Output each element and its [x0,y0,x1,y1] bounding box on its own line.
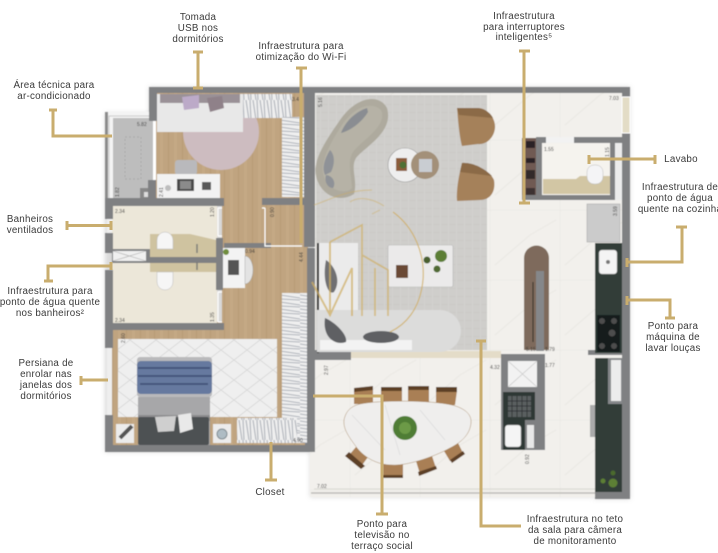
icon: wine rack [522,138,536,200]
icon: L-shaped sofa [317,243,461,353]
dimension labels: 3.59 [613,206,619,216]
callout: USB socket: Tomada [180,12,216,23]
callout: dishwasher: Ponto para [648,321,699,332]
callout: roller blinds: Persiana de [18,358,74,369]
dimension labels: 0.90 [270,207,276,217]
callout: roller blinds: janelas dos [19,380,72,391]
icon: curved sofa [315,99,388,198]
room: bedroom and hall floor [155,92,307,206]
callout: Wi-Fi: otimização do Wi-Fi [256,52,346,63]
dimension labels: 1.82 [115,187,121,197]
callout: ventilated bathrooms: Banheiros [7,214,53,225]
dimension labels: 5.15 [526,347,536,353]
dining chairs [345,386,465,478]
callout: roller blinds: dormitórios [20,391,72,402]
icon: armchairs [457,108,495,201]
callout: dishwasher: lavar louças [645,343,701,354]
callout: TV on terrace: terraço social [351,541,413,552]
callout: Wi-Fi [256,41,346,243]
callout: camera [476,340,624,547]
icon: coffee table [388,245,453,287]
dimension labels: 4.44 [299,252,305,262]
callout: kitchen hot water: Infraestrutura de [642,182,718,193]
callout: technical area: Área técnica para [13,80,95,91]
callout: technical area [13,80,112,136]
callout: dishwasher [627,296,701,354]
callout: technical area: ar-condicionado [17,91,91,102]
callout: Wi-Fi: Infraestrutura para [258,41,344,52]
walls [105,87,630,499]
callout: USB socket: dormitórios [172,34,224,45]
dimension labels: 4.90 [293,438,303,444]
room: living and kitchen floor [314,92,624,354]
dimension labels: 1.35 [210,312,216,322]
callout: smart switches: Infraestrutura [493,11,555,22]
callout: camera: de monitoramento [534,536,617,547]
dimension labels: 3.4 [292,97,299,103]
callout: hot water bathrooms: Infraestrutura para [7,286,93,297]
callout: lavatory: Lavabo [664,154,698,165]
dimension labels: 2.60 [121,333,127,343]
icon: refrigerator [587,204,620,242]
kitchen counter [595,243,622,353]
floor plan [105,87,630,499]
dining table with plant [344,401,471,465]
room: bathrooms [112,205,217,323]
room: terrace [310,354,625,497]
callout: USB socket: USB nos [178,23,218,34]
dimension labels: 2.41 [159,187,165,197]
dimension labels: 5.82 [137,122,147,128]
callout: TV on terrace [313,396,413,552]
terrace service block [501,354,545,450]
dimension labels: 1.79 [545,347,555,353]
callout: hot water bathrooms [0,262,112,319]
room: lavatory [522,137,623,200]
gold logo watermark [312,190,423,332]
callout: camera: Infraestrutura no teto [527,514,624,525]
callout: USB socket [172,12,224,88]
callout: roller blinds: enrolar nas [20,369,72,380]
dimension labels: 2.34 [115,318,125,324]
dimension labels: 1.20 [210,207,216,217]
callout: TV on terrace: Ponto para [357,519,408,530]
callout: hot water bathrooms: nos banheiros² [16,308,85,319]
dimension labels: 4.32 [490,365,500,371]
dimension labels: 1.77 [545,363,555,369]
kitchen island [524,246,549,351]
bedroom 1 furniture [157,94,304,198]
dimension labels: 2.34 [115,209,125,215]
callout: lavatory [588,154,698,165]
callout: camera: da sala para câmera [528,525,622,536]
callout: dishwasher: máquina de [646,332,700,343]
dimension labels: 1.55 [544,147,554,153]
vanity [223,248,253,288]
callout: closet [255,442,285,498]
dimension labels: 0.94 [245,249,255,255]
terrace counter [590,358,622,492]
callout: smart switches: inteligentes⁵ [496,32,552,43]
callout: roller blinds [18,358,108,402]
callout: kitchen hot water [627,182,718,267]
dimension labels: 1.15 [605,147,611,157]
icon: round side tables [388,148,439,182]
dimension labels: 7.03 [609,96,619,102]
callout: closet: Closet [255,487,285,498]
callout: smart switches [483,11,565,203]
dimension labels [115,96,619,490]
callout: kitchen hot water: ponto de água [647,193,713,204]
dimension labels: 5.16 [318,97,324,107]
dimension labels: 2.97 [324,365,330,375]
room: technical area [105,112,156,200]
callout: TV on terrace: televisão no [354,530,410,541]
bedroom 2 furniture [116,293,307,445]
callout: hot water bathrooms: ponto de água quente [0,297,100,308]
callout: ventilated bathrooms [7,214,111,236]
dimension labels: 7.02 [317,484,327,490]
callout: smart switches: para interruptores [483,22,565,33]
callout: ventilated bathrooms: ventilados [7,225,53,236]
dimension labels: 0.92 [525,454,531,464]
